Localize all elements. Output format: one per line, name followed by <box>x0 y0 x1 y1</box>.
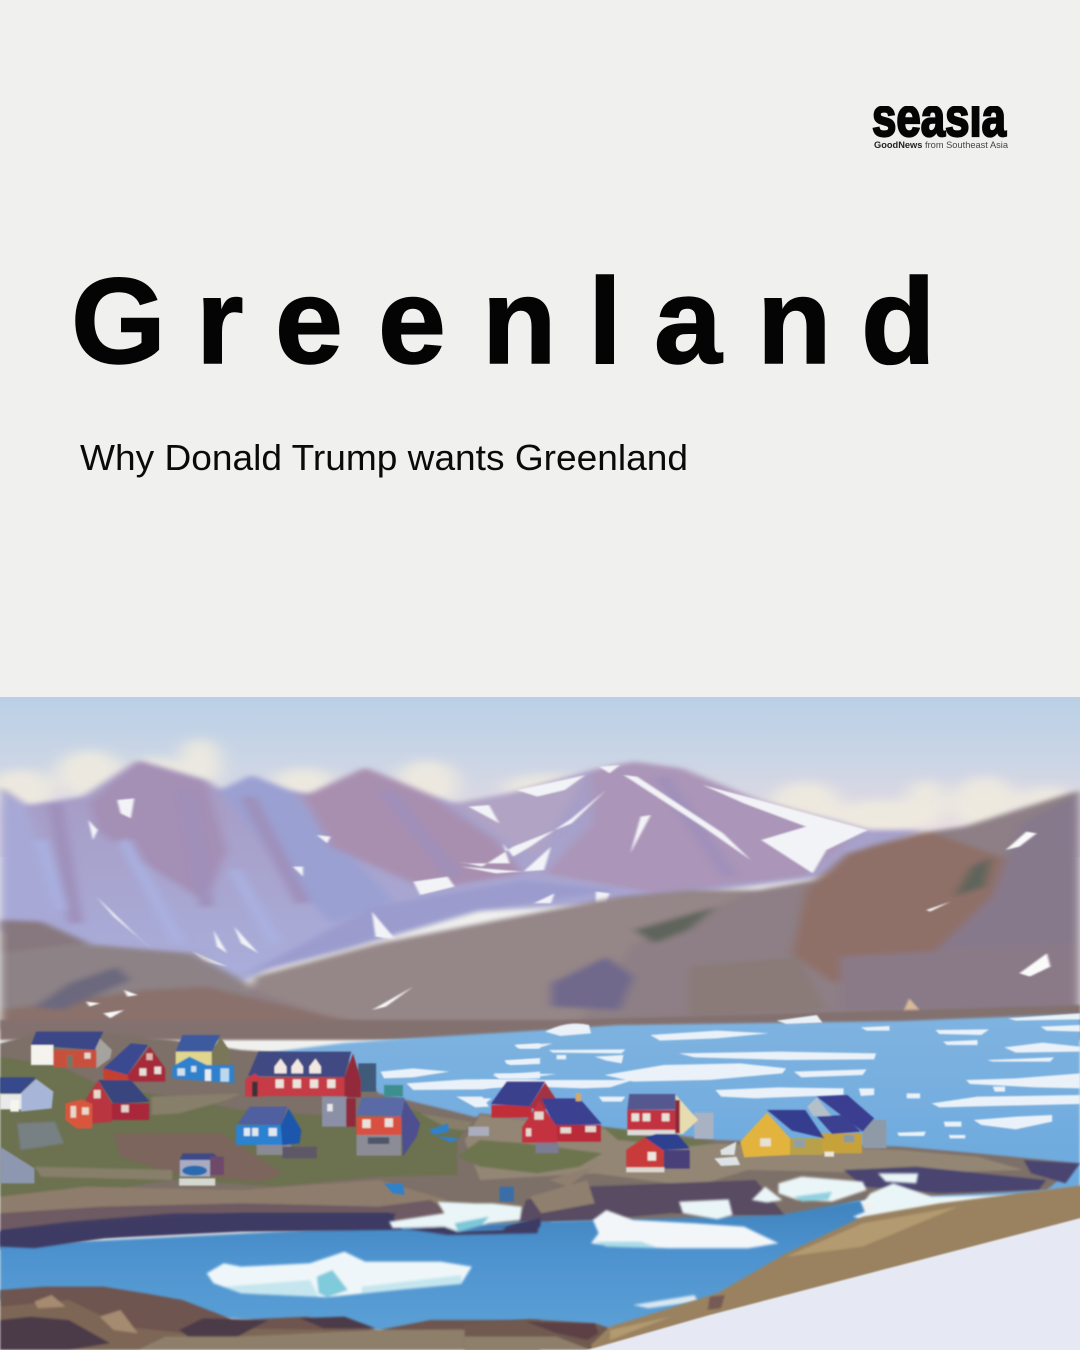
logo tagline: GoodNews from Southeast Asia <box>874 140 1009 151</box>
mountain faces <box>0 760 923 983</box>
iceberg <box>207 1252 472 1297</box>
brown ridge <box>591 1185 1080 1350</box>
house: red front <box>522 1093 602 1153</box>
blue boats <box>384 1123 514 1202</box>
house: pale blue <box>0 1077 53 1112</box>
snow patches on hills <box>86 832 1050 1018</box>
house: large red with dormers <box>245 1052 376 1097</box>
near shore strip <box>0 1005 1080 1040</box>
far mountains <box>0 760 923 983</box>
title: Greenland <box>71 253 936 389</box>
fjord water <box>231 1014 1080 1200</box>
subtitle: Why Donald Trump wants Greenland <box>80 437 688 478</box>
house: yellow <box>740 1095 886 1157</box>
houses right group <box>491 1082 886 1172</box>
left fjord ice <box>381 1043 540 1107</box>
house: grey <box>322 1097 356 1127</box>
house: red and cream <box>627 1094 713 1139</box>
clouds <box>0 738 1075 833</box>
middle hills <box>0 790 1080 1030</box>
small shed right <box>468 1127 489 1136</box>
house: red back <box>491 1082 557 1118</box>
town headland <box>0 1033 1080 1250</box>
houses left group <box>0 1032 514 1202</box>
floe group left <box>389 1202 541 1235</box>
pale rock <box>901 998 920 1020</box>
floe group right <box>591 1173 1016 1308</box>
rocks above harbour <box>0 1213 540 1248</box>
house: red double gable <box>65 1080 150 1128</box>
lower harbour water <box>0 1200 900 1340</box>
ice floes <box>480 1013 1080 1138</box>
house: maroon gable <box>103 1043 165 1082</box>
logo wordmark: seasia <box>872 86 1006 148</box>
house: small red <box>626 1134 690 1172</box>
house: yellow <box>176 1035 230 1065</box>
house: blue <box>236 1107 317 1158</box>
hill faces <box>0 790 1080 1030</box>
snow on mountains <box>88 765 868 967</box>
logo: seasia <box>872 106 1008 148</box>
small teal shed <box>384 1085 403 1097</box>
house: orange red and grey <box>356 1098 420 1157</box>
snow bank <box>576 1215 1080 1350</box>
house: long red and white <box>31 1032 112 1068</box>
boulders white <box>714 1142 740 1166</box>
house: grey at left edge <box>0 1147 34 1183</box>
sky <box>0 697 1080 857</box>
illustration: Greenland coastal village <box>0 697 1080 1350</box>
foreground rocks <box>0 1287 540 1350</box>
land mass left <box>0 1033 551 1250</box>
land mass right <box>457 1113 1080 1223</box>
shed <box>179 1153 224 1186</box>
ice near rocks <box>207 1173 1016 1308</box>
house: blue long <box>172 1057 234 1083</box>
foreground rock right <box>465 1185 1080 1350</box>
